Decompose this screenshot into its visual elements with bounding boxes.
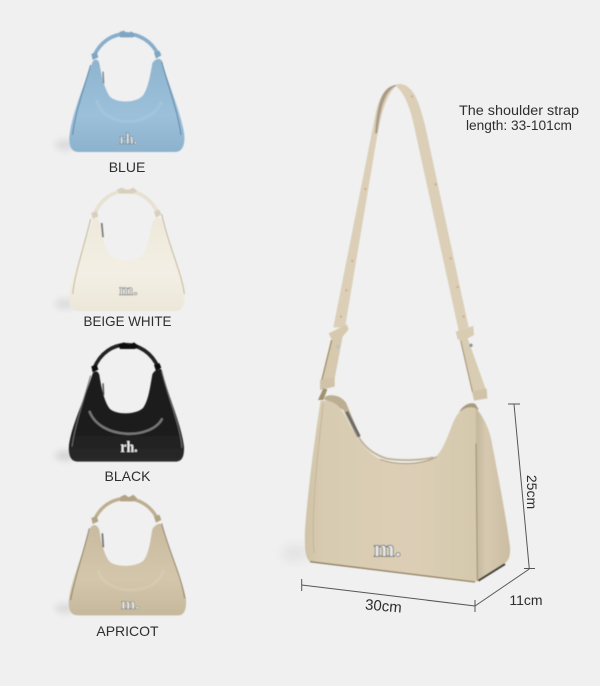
logo: m. (373, 537, 401, 563)
logo: m. (121, 596, 140, 613)
logo: rh. (120, 439, 138, 456)
icon: beige white bag (55, 188, 184, 311)
logo: m. (119, 282, 138, 299)
dimension: depth 11cm: 11cm (509, 592, 543, 608)
dimension: height 25cm: 25cm (524, 475, 540, 509)
panel: apricot bag swatch (55, 495, 186, 639)
dimension: width 30cm: 30cm (364, 596, 402, 617)
panel: beige white bag swatch (55, 188, 184, 329)
label: beige white: BEIGE WHITE (84, 313, 172, 329)
strap length note (459, 103, 579, 133)
icon: black bag (55, 342, 184, 462)
panel: blue bag swatch (55, 31, 184, 175)
icon: main bag body (282, 395, 510, 582)
icon: blue bag (55, 31, 184, 152)
strap length note: length: 33-101cm (466, 118, 572, 133)
label: apricot: APRICOT (96, 623, 159, 639)
icon: apricot bag (55, 495, 186, 615)
dimension lines (302, 404, 535, 612)
strap length note: The shoulder strap (459, 103, 579, 118)
label: black: BLACK (105, 468, 151, 484)
logo: rh. (119, 131, 137, 148)
icon: shoulder strap (318, 84, 487, 401)
panel: main bag with strap (282, 84, 510, 582)
panel: black bag swatch (55, 342, 184, 484)
label: blue: BLUE (109, 159, 145, 175)
